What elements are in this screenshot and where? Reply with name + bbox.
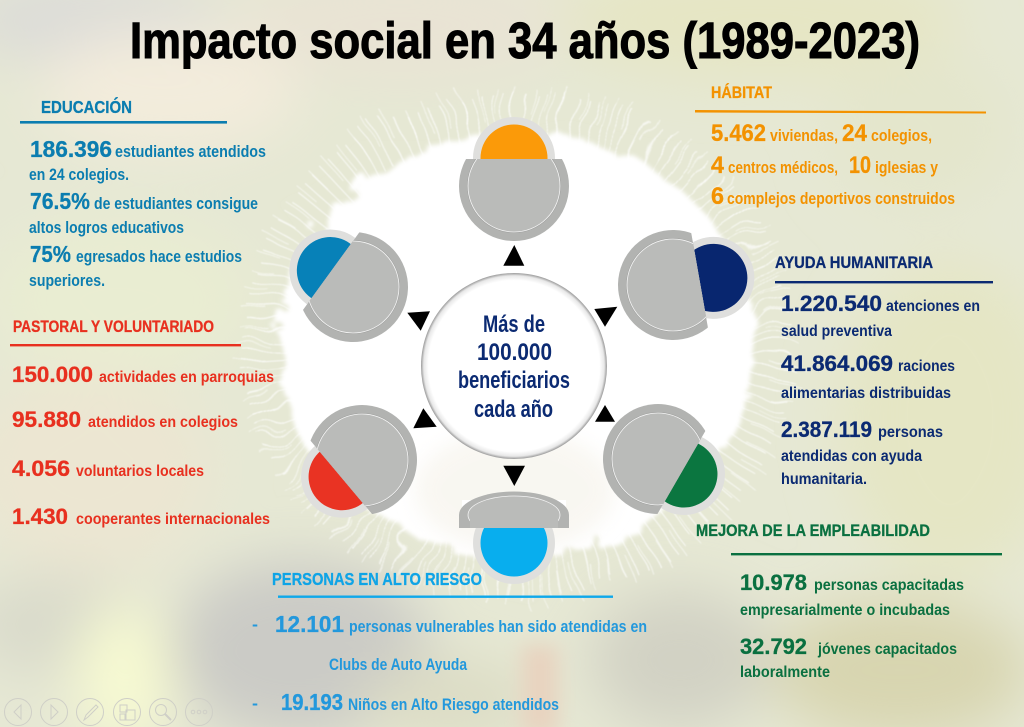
- text block: hábitat: viviendas,: [770, 127, 838, 145]
- heading: hábitat: HÁBITAT: [711, 83, 773, 102]
- panel: personas en alto riesgo: [252, 569, 647, 715]
- text block: alto riesgo: Clubs de Auto Ayuda: [329, 656, 468, 674]
- text block: alto riesgo: -: [252, 615, 258, 634]
- text block: educación: en 24 colegios.: [29, 166, 129, 184]
- heading: personas en alto riesgo: PERSONAS EN ALTO RIESGO: [272, 569, 482, 589]
- text block: ayuda humanitaria: alimentarias distribuidas: [781, 385, 951, 402]
- text block: ayuda humanitaria: raciones: [898, 358, 955, 375]
- text block: ayuda humanitaria: personas: [878, 424, 943, 441]
- text block: alto riesgo: [252, 611, 647, 715]
- slideshow controls: [4, 698, 212, 726]
- text block: educación: 186.396: [30, 136, 112, 162]
- text block: ayuda humanitaria: 41.864.069: [781, 351, 893, 376]
- text block: alto riesgo: 19.193: [281, 689, 343, 715]
- text block: hábitat: centros médicos,: [728, 159, 838, 177]
- text block: ayuda humanitaria: 1.220.540: [781, 291, 882, 316]
- text block: pastoral: atendidos en colegios: [88, 414, 238, 431]
- text block: empleabilidad: jóvenes capacitados: [817, 641, 957, 658]
- text block: ayuda humanitaria: salud preventiva: [781, 323, 892, 340]
- central circle: [421, 273, 607, 459]
- text block: alto riesgo: -: [252, 694, 258, 713]
- text block: educación: altos logros educativos: [29, 219, 184, 237]
- unit: personas en alto riesgo (light blue): [459, 492, 569, 584]
- text block: empleabilidad: [740, 570, 964, 681]
- text block: educación: 75%: [30, 241, 71, 267]
- panel: hábitat: [695, 83, 986, 210]
- text block: alto riesgo: Niños en Alto Riesgo atendidos: [348, 696, 559, 714]
- unit: empleabilidad (green): [603, 404, 725, 515]
- text block: ayuda humanitaria: 2.387.119: [781, 417, 872, 442]
- text block: pastoral: actividades en parroquias: [99, 369, 274, 386]
- text block: hábitat: iglesias y: [875, 159, 939, 177]
- text block: hábitat: 4: [711, 152, 725, 179]
- text block: pastoral: [12, 362, 274, 529]
- heading: pastoral y voluntariado: PASTORAL Y VOLUNTARIADO: [13, 318, 214, 336]
- text block: hábitat: 24: [842, 120, 868, 147]
- unit: ayuda humanitaria (navy): [618, 230, 754, 340]
- text block: hábitat: [711, 120, 955, 210]
- text block: empleabilidad: personas capacitadas: [814, 577, 964, 594]
- text block: educación: estudiantes atendidos: [115, 143, 266, 161]
- text block: empleabilidad: 32.792: [740, 634, 807, 659]
- text block: hábitat: 6: [711, 183, 724, 210]
- text block: alto riesgo: 12.101: [275, 611, 344, 637]
- text block: empleabilidad: laboralmente: [740, 664, 830, 681]
- text block: pastoral: 1.430: [12, 504, 68, 529]
- central text: Más de: [483, 311, 545, 338]
- text block: educación: de estudiantes consigue: [94, 195, 258, 213]
- text block: educación: egresados hace estudios: [76, 248, 242, 266]
- text block: empleabilidad: empresarialmente o incubadas: [740, 602, 950, 619]
- text block: pastoral: 4.056: [12, 456, 70, 481]
- text block: hábitat: 10: [849, 152, 871, 179]
- cycle diagram: [265, 117, 763, 584]
- unit: educación (blue): [290, 230, 408, 342]
- text block: ayuda humanitaria: humanitaria.: [781, 471, 867, 488]
- text block: hábitat: colegios,: [871, 127, 932, 145]
- text block: ayuda humanitaria: atendidas con ayuda: [781, 448, 922, 465]
- text block: hábitat: 5.462: [711, 120, 766, 147]
- text block: pastoral: cooperantes internacionales: [76, 511, 270, 528]
- text block: ayuda humanitaria: [781, 291, 980, 488]
- text block: educación: superiores.: [29, 272, 105, 290]
- text block: pastoral: 150.000: [12, 362, 93, 387]
- text block: pastoral: 95.880: [12, 407, 81, 432]
- text block: alto riesgo: personas vulnerables han sido atendidas en: [349, 618, 647, 636]
- central text: cada año: [474, 396, 553, 423]
- text block: empleabilidad: 10.978: [740, 570, 807, 595]
- heading: ayuda humanitaria: AYUDA HUMANITARIA: [775, 254, 933, 272]
- dandelion: [250, 99, 786, 591]
- heading: educación: EDUCACIÓN: [41, 96, 132, 117]
- unit: pastoral (red): [301, 405, 417, 518]
- unit: hábitat (orange): [459, 117, 569, 241]
- text block: hábitat: complejos deportivos construidos: [727, 190, 955, 208]
- panel: ayuda humanitaria: [775, 254, 993, 488]
- text block: pastoral: voluntarios locales: [76, 463, 204, 480]
- heading: mejora de la empleabilidad: MEJORA DE LA EMPLEABILIDAD: [696, 522, 930, 540]
- central text: [458, 311, 570, 423]
- text block: ayuda humanitaria: atenciones en: [886, 298, 980, 315]
- text block: educación: [29, 136, 266, 290]
- arrows: [407, 245, 617, 486]
- panel: pastoral y voluntariado: [10, 318, 274, 529]
- panel: educación: [20, 96, 266, 290]
- central text: beneficiarios: [458, 367, 570, 394]
- panel: mejora de la empleabilidad: [696, 522, 1002, 681]
- central text: 100.000: [477, 339, 552, 366]
- text block: educación: 76.5%: [30, 188, 90, 214]
